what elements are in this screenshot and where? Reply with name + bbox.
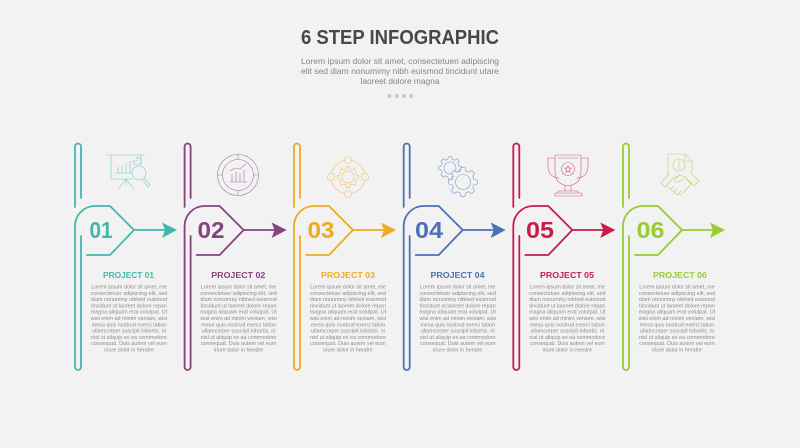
project 04 body text: iriure dolor in hendre <box>433 348 482 354</box>
project 06 body text: diam nonummy nibhed euismod <box>639 297 715 303</box>
project 05 body text: consequat. Duis autem vel eum <box>530 341 606 347</box>
project 01 body text: mesa quis nostrud exerci tation <box>92 322 166 328</box>
project 01 body text: wisi enim ad minim veniam, wisi <box>90 316 167 322</box>
icon: chart in ring <box>218 154 258 196</box>
project 01 body text: consectetuer adipiscing elit, sed <box>91 291 167 297</box>
project 02 body text <box>199 284 277 354</box>
project 05 body text: magna aliquam erat volutpat. Ut <box>529 310 606 316</box>
step 3 frame <box>294 144 353 370</box>
project 03 body text: consequat. Duis autem vel eum <box>310 341 386 347</box>
step 1 number: 01 <box>90 217 113 243</box>
project 03 body text: nisl ut aliquip ex ea commodore <box>310 335 386 341</box>
project 04 body text <box>419 284 496 354</box>
project 02 body text: mesa quis nostrud exerci tation <box>201 322 276 328</box>
step 5 frame <box>513 144 572 370</box>
step 2 arrow <box>244 222 287 238</box>
step 3 arrow <box>353 222 396 238</box>
project 01 body text: consequat. Duis autem vel eum <box>91 341 167 347</box>
project 05 heading: PROJECT 05 <box>540 270 594 280</box>
project 06 body text <box>638 284 716 354</box>
subtitle text: laoreet dolore magna <box>360 76 440 86</box>
step 4 number: 04 <box>415 217 443 243</box>
subtitle text: Lorem ipsum dolor sit amet, consectetueri adipiscing <box>301 56 499 66</box>
project 05 body text: tincidunt ut laoreet dolore repan <box>529 303 605 309</box>
project 02 body text: wisi enim ad minim veniam, wisi <box>199 316 277 322</box>
step 1 arrow <box>134 222 177 238</box>
project 05 body text: nisl ut aliquip ex ea commodore <box>529 335 605 341</box>
project 04 heading: PROJECT 04 <box>430 270 485 280</box>
project 06 body text: nisl ut aliquip ex ea commodore <box>639 335 715 341</box>
step 4 <box>404 144 506 370</box>
project 01 heading: PROJECT 01 <box>103 270 154 280</box>
project 03 body text: diam nonummy nibhed euismod <box>310 297 386 303</box>
project 02 body text: tincidunt ut laoreet dolore repan <box>201 303 277 309</box>
project 02 body text: consectetuer adipiscing elit, sed <box>200 291 277 297</box>
project 01 body text: iriure dolor in hendre <box>104 348 154 354</box>
project 02 body text: iriure dolor in hendre <box>214 348 263 354</box>
project 06 body text: wisi enim ad minim veniam, wisi <box>638 316 715 322</box>
step 3 number: 03 <box>308 217 334 243</box>
project 02 body text: diam nonummy nibhed euismod <box>200 297 277 303</box>
project 02 body text: ullamcorper suscipit lobortis. ni <box>202 329 275 335</box>
step 2 <box>185 144 287 370</box>
pagination dots <box>388 94 413 98</box>
icon: two gears <box>439 157 477 196</box>
title: 6 STEP INFOGRAPHIC <box>301 27 499 49</box>
project 02 body text: consequat. Duis autem vel eum <box>201 341 277 347</box>
step 6 arrow <box>682 222 725 238</box>
project 03 body text: wisi enim ad minim veniam, wisi <box>309 316 386 322</box>
project 04 body text: diam nonummy nibhed euismod <box>419 297 496 303</box>
project 06 body text: Lorem ipsum dolor sit amet, me <box>639 284 715 290</box>
step 6 frame <box>623 144 682 370</box>
step 5 number: 05 <box>526 217 554 243</box>
project 05 body text: wisi enim ad minim veniam, wisi <box>528 316 605 322</box>
project 05 body text: Lorem ipsum dolor sit amet, me <box>530 284 605 290</box>
project 03 body text: iriure dolor in hendre <box>323 348 373 354</box>
project 01 body text: diam nonummy nibhed euismod <box>91 297 167 303</box>
step 2 frame <box>185 144 244 370</box>
project 04 body text: consectetuer adipiscing elit, sed <box>419 291 496 297</box>
project 04 body text: nisl ut aliquip ex ea commodore <box>420 335 496 341</box>
project 01 body text: Lorem ipsum dolor sit amet, me <box>91 284 167 290</box>
icon: gear with orbit <box>328 156 368 198</box>
project 04 body text: wisi enim ad minim veniam, wisi <box>419 316 496 322</box>
project 01 body text <box>90 284 168 354</box>
project 06 body text: tincidunt ut laoreet dolore repan <box>639 303 715 309</box>
project 06 body text: consequat. Duis autem vel eum <box>639 341 715 347</box>
project 06 heading: PROJECT 06 <box>653 270 707 280</box>
project 06 body text: mesa quis nostrud exerci tation <box>640 322 714 328</box>
project 05 body text: diam nonummy nibhed euismod <box>529 297 606 303</box>
project 02 body text: Lorem ipsum dolor sit amet, me <box>201 284 276 290</box>
project 04 body text: ullamcorper suscipit lobortis. ni <box>421 329 495 335</box>
step 6 number: 06 <box>636 217 664 243</box>
project 04 body text: tincidunt ut laoreet dolore repan <box>420 303 496 309</box>
project 05 body text: ullamcorper suscipit lobortis. ni <box>530 329 604 335</box>
project 03 body text: mesa quis nostrud exerci tation <box>311 322 385 328</box>
project 05 body text <box>528 284 606 354</box>
icon: document and handshake <box>661 154 699 195</box>
project 01 body text: ullamcorper suscipit lobortis. ni <box>92 329 166 335</box>
project 03 body text: consectetuer adipiscing elit, sed <box>310 291 386 297</box>
icon: trophy <box>548 155 588 196</box>
project 04 body text: Lorem ipsum dolor sit amet, me <box>420 284 495 290</box>
project 03 heading: PROJECT 03 <box>321 270 375 280</box>
step 5 arrow <box>572 222 615 238</box>
project 03 body text: magna aliquam erat volutpat. Ut <box>310 310 387 316</box>
project 06 body text: magna aliquam erat volutpat. Ut <box>639 310 716 316</box>
icon: presentation board with magnifier <box>107 155 150 189</box>
step 4 frame <box>404 144 463 370</box>
step 3 <box>294 144 396 370</box>
project 01 body text: magna aliquam erat volutpat. Ut <box>91 310 168 316</box>
step 4 arrow <box>463 222 506 238</box>
project 01 body text: tincidunt ut laoreet dolore repan <box>91 303 167 309</box>
project 02 body text: nisl ut aliquip ex ea commodore <box>201 335 277 341</box>
project 02 heading: PROJECT 02 <box>211 270 266 280</box>
step 6 <box>623 144 725 370</box>
subtitle text: elit sed diam nonumimy nibh euismod tincidunt utare <box>301 66 499 76</box>
project 03 body text <box>309 284 387 354</box>
step 1 frame <box>75 144 134 370</box>
step 5 <box>513 144 615 370</box>
project 05 body text: mesa quis nostrud exerci tation <box>530 322 605 328</box>
project 05 body text: iriure dolor in hendre <box>543 348 592 354</box>
project 06 body text: iriure dolor in hendre <box>652 348 702 354</box>
project 06 body text: consectetuer adipiscing elit, sed <box>639 291 715 297</box>
project 03 body text: ullamcorper suscipit lobortis. ni <box>311 329 385 335</box>
project 02 body text: magna aliquam erat volutpat. Ut <box>200 310 277 316</box>
project 03 body text: Lorem ipsum dolor sit amet, me <box>310 284 386 290</box>
project 01 body text: nisl ut aliquip ex ea commodore <box>91 335 167 341</box>
project 04 body text: consequat. Duis autem vel eum <box>420 341 496 347</box>
project 06 body text: ullamcorper suscipit lobortis. ni <box>640 329 714 335</box>
project 04 body text: magna aliquam erat volutpat. Ut <box>419 310 496 316</box>
project 05 body text: consectetuer adipiscing elit, sed <box>529 291 606 297</box>
project 04 body text: mesa quis nostrud exerci tation <box>420 322 495 328</box>
subtitle text <box>301 56 499 86</box>
step 1 <box>75 144 177 370</box>
project 03 body text: tincidunt ut laoreet dolore repan <box>310 303 386 309</box>
step 2 number: 02 <box>198 217 224 243</box>
